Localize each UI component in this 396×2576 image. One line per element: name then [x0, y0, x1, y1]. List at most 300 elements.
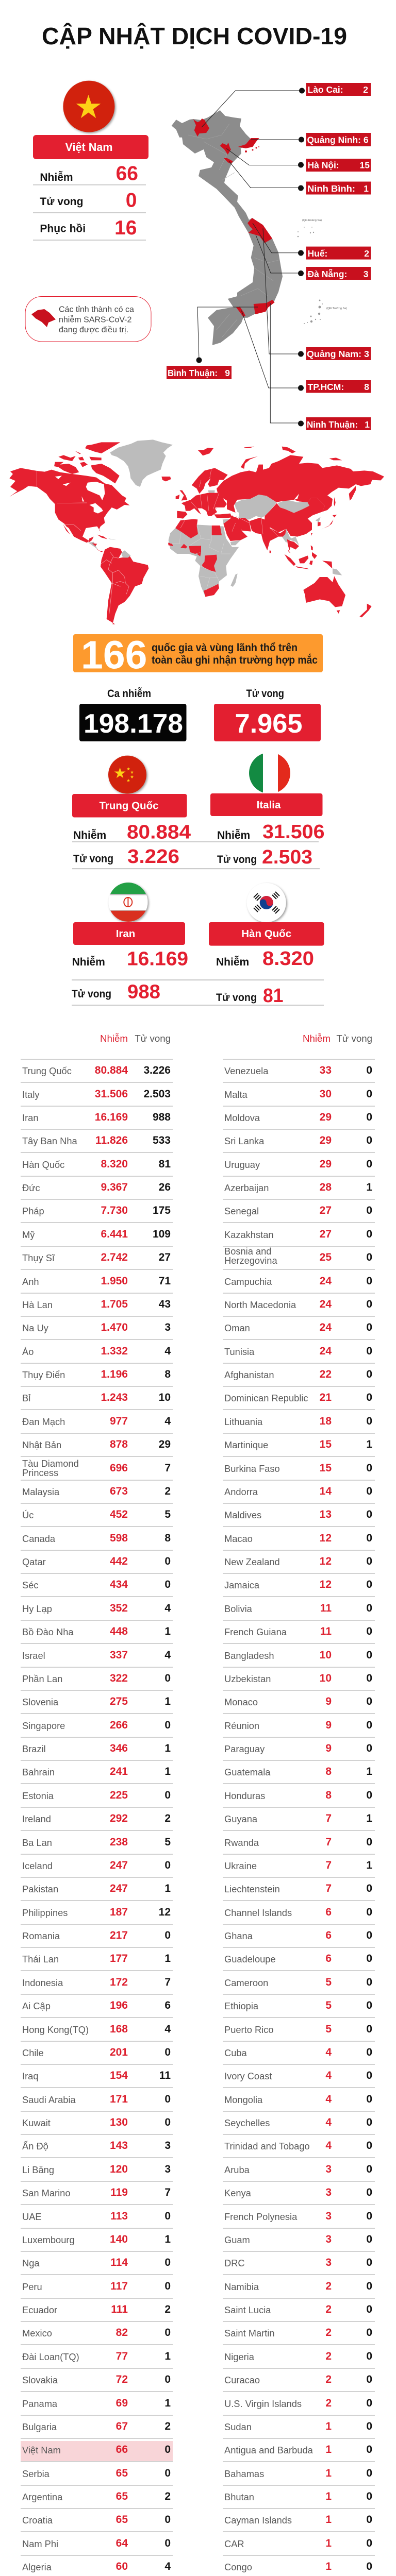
row: Bahrain — [21, 1761, 173, 1784]
row: Ghana: Ghana — [224, 1930, 253, 1941]
row: Uzbekistan: Uzbekistan — [224, 1673, 271, 1684]
row: Trinidad and Tobago: 4 — [325, 2140, 332, 2151]
label: Lào Cai: Lào Cai: — [307, 84, 343, 95]
row: Úc: 5 — [164, 1509, 171, 1520]
province: Ninh Bình — [224, 158, 233, 164]
row: Réunion — [223, 1714, 375, 1738]
row: Ecuador: Ecuador — [22, 2304, 57, 2315]
row: Iraq — [21, 2065, 173, 2088]
row: Thái Lan: 1 — [164, 1953, 171, 1964]
row: Bulgaria: Bulgaria — [22, 2421, 57, 2432]
row: Ecuador: 2 — [164, 2303, 171, 2315]
map: Americas and Greenland — [9, 439, 173, 624]
row: Kenya: 0 — [366, 2187, 372, 2198]
row: Thụy Điển: 1.196 — [101, 1368, 128, 1380]
row: Peru: Peru — [22, 2281, 42, 2292]
row: Trung Quốc: 80.884 — [95, 1064, 128, 1076]
stats: Trung Quốc: 80.884 — [127, 821, 191, 843]
row: Pakistan: Pakistan — [22, 1884, 58, 1894]
row: Mongolia — [223, 2088, 375, 2112]
row: Seychelles: Seychelles — [224, 2117, 270, 2128]
row: Congo — [223, 2556, 375, 2576]
row: Ba Lan: 5 — [164, 1836, 171, 1848]
row: New Zealand: 12 — [320, 1555, 332, 1567]
row: Indonesia: Indonesia — [22, 1977, 63, 1988]
row: Singapore: Singapore — [22, 1720, 65, 1731]
row: Saint Lucia: 2 — [325, 2303, 332, 2315]
row: Hy Lạp: 352 — [110, 1602, 128, 1614]
row: Dominican Republic: 21 — [320, 1392, 332, 1403]
row: Philippines: 12 — [159, 1906, 171, 1918]
row: Slovakia: 72 — [116, 2374, 128, 2385]
row: Ethiopia: 0 — [366, 1999, 372, 2011]
row: DRC — [223, 2252, 375, 2275]
row: Bulgaria — [21, 2415, 173, 2439]
row: Ecuador: 111 — [111, 2303, 128, 2315]
row: Antigua and Barbuda: 0 — [366, 2444, 372, 2455]
row: Nhật Bản: 29 — [159, 1438, 171, 1450]
row: Thụy Sĩ: Thụy Sĩ — [22, 1252, 55, 1263]
row: Curacao: 0 — [366, 2374, 372, 2385]
row: Qatar: 0 — [164, 1555, 171, 1567]
row: Bolivia: 0 — [366, 1602, 372, 1614]
row: U.S. Virgin Islands: 2 — [325, 2397, 332, 2409]
row: Tây Ban Nha — [21, 1130, 173, 1153]
row: Antigua and Barbuda: Antigua and Barbuda — [224, 2445, 313, 2455]
row: Ấn Độ: 143 — [110, 2140, 128, 2151]
row: Cuba: 0 — [366, 2046, 372, 2058]
row: Jamaica: 0 — [366, 1579, 372, 1590]
row: Slovenia: 275 — [110, 1696, 128, 1707]
row: Oman: 24 — [320, 1321, 332, 1333]
row: Iraq: Iraq — [22, 2071, 39, 2081]
row: Puerto Rico: Puerto Rico — [224, 2024, 274, 2035]
row: Bỉ: Bỉ — [22, 1393, 30, 1403]
row: Malta: 30 — [320, 1088, 332, 1099]
row: Bhutan: 0 — [366, 2490, 372, 2502]
row: Jamaica: 12 — [320, 1579, 332, 1590]
row: Dominican Republic: 0 — [366, 1392, 372, 1403]
row: CAR: 0 — [366, 2537, 372, 2549]
row: Liechtenstein: 0 — [366, 1883, 372, 1894]
row: Slovenia — [21, 1691, 173, 1714]
row: Malaysia — [21, 1481, 173, 1504]
row: Chile: Chile — [22, 2047, 44, 2058]
table: right column — [223, 1059, 375, 2576]
row: Argentina: 2 — [164, 2490, 171, 2502]
row: Nigeria: 0 — [366, 2350, 372, 2362]
row: Burkina Faso — [223, 1457, 375, 1481]
heading: Iran: Iran — [116, 928, 135, 940]
row: Anh — [21, 1270, 173, 1293]
row: Estonia: 0 — [164, 1789, 171, 1801]
row: Andorra: 0 — [366, 1485, 372, 1497]
row: Maldives: 0 — [366, 1509, 372, 1520]
row: Cameroon: 5 — [325, 1976, 332, 1988]
table header: left: Nhiễm — [100, 1033, 128, 1044]
table header: right — [303, 1033, 372, 1044]
stat: global deaths: 7.965 — [235, 709, 302, 739]
row: Séc: 0 — [164, 1579, 171, 1590]
row: Venezuela: 33 — [320, 1064, 332, 1076]
row: Romania — [21, 1925, 173, 1948]
row: Aruba: 3 — [325, 2163, 332, 2175]
row: Li Băng: 120 — [110, 2163, 128, 2175]
row: Venezuela: 0 — [366, 1064, 372, 1076]
row: Cameroon: 0 — [366, 1976, 372, 1988]
row: Việt Nam (highlighted): 66 — [116, 2444, 128, 2455]
table: left column — [21, 1059, 173, 2576]
row: Sudan: 0 — [366, 2420, 372, 2432]
row: Indonesia: 7 — [164, 1976, 171, 1988]
row: Guatemala: 8 — [325, 1766, 332, 1777]
row: Saint Lucia: 0 — [366, 2303, 372, 2315]
stats: Iran — [72, 948, 188, 1003]
row: Honduras: Honduras — [224, 1790, 265, 1801]
label: Hà Nội: Hà Nội: — [307, 160, 339, 170]
heading: Trung Quốc: Trung Quốc — [99, 800, 159, 812]
row: Saudi Arabia: 171 — [110, 2093, 128, 2105]
row: Lithuania: 18 — [320, 1415, 332, 1427]
row: Slovenia: 1 — [164, 1696, 171, 1707]
row: Cayman Islands: 0 — [366, 2514, 372, 2526]
top graphics: header, maps, stat cards — [9, 23, 384, 1007]
row: Kazakhstan: Kazakhstan — [224, 1229, 274, 1240]
row: Bhutan: 1 — [325, 2490, 332, 2502]
row: Campuchia: 0 — [366, 1275, 372, 1287]
row: Đài Loan(TQ): Đài Loan(TQ) — [22, 2351, 79, 2362]
row: Moldova: 0 — [366, 1111, 372, 1123]
row: Thụy Sĩ: 27 — [159, 1251, 171, 1263]
row: Sri Lanka: 0 — [366, 1134, 372, 1146]
row: Hàn Quốc: 81 — [159, 1158, 171, 1170]
row: North Macedonia: 24 — [320, 1298, 332, 1310]
row: Andorra: 14 — [320, 1485, 332, 1497]
callout: 166 countries: quốc gia và vùng lãnh thổ trên — [152, 642, 298, 654]
row: Afghanistan — [223, 1364, 375, 1387]
row: Nhật Bản: 878 — [110, 1438, 128, 1450]
label: Huế: Huế: — [307, 248, 327, 259]
row: Iran — [21, 1107, 173, 1130]
row: Áo — [21, 1340, 173, 1364]
row: Bangladesh — [223, 1644, 375, 1667]
world map — [9, 439, 384, 624]
panel: Hàn Quốc — [209, 883, 324, 1007]
row: Hy Lạp: 4 — [164, 1602, 171, 1614]
row: Jamaica — [223, 1574, 375, 1597]
row: U.S. Virgin Islands: 0 — [366, 2397, 372, 2409]
callout: 166 countries: 166 — [81, 633, 147, 677]
row: Channel Islands: 6 — [325, 1906, 332, 1918]
row: Cayman Islands — [223, 2509, 375, 2532]
map: Europe, Africa, Asia and Oceania — [168, 447, 384, 617]
row: Tunisia: 24 — [320, 1345, 332, 1357]
stat: recovered: 16 — [114, 217, 137, 239]
row: Panama: 1 — [164, 2397, 171, 2409]
table header: right: Tử vong — [336, 1033, 372, 1044]
row: French Polynesia: 3 — [325, 2210, 332, 2222]
row: Oman — [223, 1317, 375, 1340]
stat: recovered — [33, 217, 146, 241]
row: Guyana: Guyana — [224, 1814, 257, 1824]
row: Uzbekistan: 10 — [320, 1672, 332, 1684]
label: Ninh Bình — [298, 181, 371, 195]
row: Đức: Đức — [22, 1182, 40, 1193]
row: Bahamas: 0 — [366, 2467, 372, 2479]
row: Đan Mạch: Đan Mạch — [22, 1416, 65, 1427]
row: Mongolia: Mongolia — [224, 2094, 262, 2105]
row: Thụy Điển: 8 — [164, 1368, 171, 1380]
row: Indonesia: 172 — [110, 1976, 128, 1988]
row: Antigua and Barbuda: 1 — [325, 2444, 332, 2455]
row: Hàn Quốc: 8.320 — [101, 1158, 128, 1170]
row: Uzbekistan — [223, 1667, 375, 1691]
row: Thái Lan: 177 — [110, 1953, 128, 1964]
row: French Polynesia: French Polynesia — [224, 2211, 297, 2222]
row: Hà Lan: 43 — [159, 1298, 171, 1310]
stats: Hàn Quốc: Nhiễm — [216, 956, 249, 968]
row: Ivory Coast: 0 — [366, 2070, 372, 2081]
row: Luxembourg: 140 — [110, 2233, 128, 2245]
row: North Macedonia: North Macedonia — [224, 1299, 296, 1310]
row: Malta — [223, 1083, 375, 1107]
row: Bolivia: 11 — [320, 1602, 332, 1614]
row: Rwanda — [223, 1831, 375, 1855]
row: Lithuania: 0 — [366, 1415, 372, 1427]
row: Croatia — [21, 2509, 173, 2532]
heading: Iran — [73, 922, 185, 945]
row: French Guiana: 11 — [320, 1625, 332, 1637]
row: Ukraine: 7 — [325, 1859, 332, 1871]
row: Bahrain: Bahrain — [22, 1767, 55, 1777]
row: Andorra: Andorra — [224, 1486, 258, 1497]
row: Bồ Đào Nha — [21, 1621, 173, 1644]
stats: Hàn Quốc: 81 — [263, 985, 284, 1007]
row: Lithuania — [223, 1410, 375, 1434]
row: Martinique: 1 — [366, 1438, 372, 1450]
row: Canada: Canada — [22, 1533, 55, 1544]
row: Ivory Coast: 4 — [325, 2070, 332, 2081]
row: Hong Kong(TQ): 168 — [110, 2023, 128, 2035]
row: Liechtenstein: 7 — [325, 1883, 332, 1894]
row: San Marino: 119 — [110, 2187, 128, 2198]
row: Sri Lanka: Sri Lanka — [224, 1136, 264, 1146]
row: Maldives: Maldives — [224, 1510, 261, 1520]
row: Bhutan: Bhutan — [224, 2492, 254, 2502]
stat: recovered: Phục hồi — [40, 223, 86, 235]
label: Quảng Nam — [298, 347, 371, 360]
row: CAR — [223, 2532, 375, 2556]
label: TP.HCM: 8 — [364, 382, 369, 392]
row: Đức: 26 — [159, 1181, 171, 1193]
row: Dominican Republic — [223, 1387, 375, 1410]
row: Kuwait: 130 — [110, 2116, 128, 2128]
row: Brazil: 1 — [164, 1742, 171, 1754]
row: Liechtenstein: Liechtenstein — [224, 1884, 280, 1894]
row: Iran: 16.169 — [95, 1111, 128, 1123]
row: Áo: Áo — [22, 1346, 34, 1357]
row: U.S. Virgin Islands — [223, 2392, 375, 2415]
row: Trung Quốc: 3.226 — [143, 1064, 171, 1076]
row: Tunisia: 0 — [366, 1345, 372, 1357]
row: Brazil: Brazil — [22, 1743, 46, 1754]
row: Iraq: 11 — [159, 2070, 171, 2081]
row: Đài Loan(TQ): 77 — [116, 2350, 128, 2362]
row: Serbia: 0 — [164, 2467, 171, 2479]
row: Estonia: Estonia — [22, 1790, 54, 1801]
row: Sudan: Sudan — [224, 2421, 252, 2432]
stats: Iran: 16.169 — [127, 948, 188, 970]
row: Lithuania: Lithuania — [224, 1416, 262, 1427]
row: Mongolia: 4 — [325, 2093, 332, 2105]
row: Malta: 0 — [366, 1088, 372, 1099]
row: Luxembourg — [21, 2229, 173, 2252]
row: Singapore — [21, 1714, 173, 1738]
icon: province shape — [31, 309, 56, 327]
row: Macao: 12 — [320, 1532, 332, 1544]
row: Campuchia — [223, 1270, 375, 1293]
row: Anh: 71 — [159, 1275, 171, 1287]
label: Đà Nẵng: 3 — [364, 269, 369, 279]
row: Uruguay: Uruguay — [224, 1159, 260, 1170]
row: Brazil: 346 — [110, 1742, 128, 1754]
row: Italy — [21, 1083, 173, 1107]
row: Ukraine: 1 — [366, 1859, 372, 1871]
row: Bahamas — [223, 2462, 375, 2486]
callout: 166 countries: toàn cầu ghi nhận trường hợp mắc — [152, 654, 318, 666]
row: Estonia — [21, 1784, 173, 1808]
row: Bhutan — [223, 2486, 375, 2509]
row: Azerbaijan: 1 — [366, 1181, 372, 1193]
row: Ireland: Ireland — [22, 1814, 51, 1824]
label: Lào Cai: 2 — [363, 84, 368, 95]
stat: deaths — [33, 190, 146, 213]
row: Channel Islands: Channel Islands — [224, 1907, 292, 1918]
row: Trinidad and Tobago — [223, 2135, 375, 2158]
row: Maldives: 13 — [320, 1509, 332, 1520]
row: Ấn Độ: Ấn Độ — [22, 2141, 48, 2151]
row: Ba Lan — [21, 1831, 173, 1855]
row: Phần Lan: 322 — [110, 1672, 128, 1684]
stat: deaths: 0 — [126, 190, 137, 211]
row: Paraguay: 9 — [325, 1742, 332, 1754]
row: Slovenia: Slovenia — [22, 1697, 58, 1707]
row: San Marino: San Marino — [22, 2188, 70, 2198]
row: North Macedonia — [223, 1293, 375, 1317]
row: Martinique: Martinique — [224, 1439, 268, 1450]
row: Guadeloupe — [223, 1948, 375, 1971]
row: Trinidad and Tobago: 0 — [366, 2140, 372, 2151]
row: Đức: 9.367 — [101, 1181, 128, 1193]
row: UAE: UAE — [22, 2211, 42, 2222]
stats: Italia: Tử vong — [217, 854, 257, 866]
row: Sudan — [223, 2415, 375, 2439]
row: French Guiana: 0 — [366, 1625, 372, 1637]
row: Liechtenstein — [223, 1878, 375, 1901]
row: Panama: Panama — [22, 2398, 57, 2409]
title: CẬP NHẬT DỊCH COVID-19 — [42, 23, 347, 49]
row: Séc: Séc — [22, 1580, 39, 1590]
row: Luxembourg: 1 — [164, 2233, 171, 2245]
row: Philippines: 187 — [110, 1906, 128, 1918]
row: Chile — [21, 2041, 173, 2065]
row: Afghanistan: 0 — [366, 1368, 372, 1380]
panel: Việt Nam summary — [33, 81, 148, 241]
row: Ai Cập — [21, 1995, 173, 2018]
row: Honduras: 0 — [366, 1789, 372, 1801]
row: Thụy Điển — [21, 1364, 173, 1387]
row: Ấn Độ: 3 — [164, 2140, 171, 2151]
row: Uruguay: 0 — [366, 1158, 372, 1170]
table header: left: Tử vong — [135, 1033, 171, 1044]
row: Na Uy: Na Uy — [22, 1323, 48, 1333]
row: Li Băng — [21, 2158, 173, 2182]
row: Venezuela — [223, 1060, 375, 1083]
province: Quảng Ninh — [238, 138, 259, 152]
row: Slovakia: Slovakia — [22, 2375, 58, 2385]
row: Jamaica: Jamaica — [224, 1580, 259, 1590]
row: Guyana: 7 — [325, 1812, 332, 1824]
row: Việt Nam (highlighted) — [21, 2439, 173, 2462]
row: Aruba: Aruba — [224, 2164, 250, 2175]
row: Nga — [21, 2252, 173, 2275]
row: Trung Quốc: Trung Quốc — [22, 1065, 72, 1076]
row: Ai Cập: Ai Cập — [22, 2001, 51, 2011]
province: TP.HCM — [236, 307, 245, 317]
stats: Trung Quốc: Nhiễm — [73, 829, 106, 841]
row: Aruba: 0 — [366, 2163, 372, 2175]
stats: Italia: 31.506 — [262, 821, 325, 843]
row: Phần Lan — [21, 1667, 173, 1691]
row: Cameroon — [223, 1971, 375, 1995]
row: Israel: 4 — [164, 1649, 171, 1661]
row: Guadeloupe: 6 — [325, 1953, 332, 1964]
row: Senegal: 27 — [320, 1205, 332, 1216]
row: Bolivia — [223, 1597, 375, 1621]
row: Italy: Italy — [22, 1089, 40, 1099]
row: Argentina: Argentina — [22, 2492, 62, 2502]
row: Saint Lucia — [223, 2299, 375, 2322]
row: Namibia: 0 — [366, 2280, 372, 2292]
row: Guatemala — [223, 1761, 375, 1784]
row: Áo: 4 — [164, 1345, 171, 1357]
row: Kazakhstan: 0 — [366, 1228, 372, 1240]
row: Algeria: Algeria — [22, 2562, 52, 2572]
label: Bình Thuận: Bình Thuận: — [168, 368, 218, 378]
row: Rwanda: Rwanda — [224, 1837, 259, 1848]
row: Peru: 0 — [164, 2280, 171, 2292]
icon: South Korea flag — [247, 883, 286, 922]
label: Quảng Ninh: Quảng Ninh: 6 — [307, 135, 369, 145]
row: Hàn Quốc — [21, 1153, 173, 1177]
row: Malta: Malta — [224, 1089, 248, 1099]
icon: China flag — [108, 756, 146, 794]
row: Ireland: 292 — [110, 1812, 128, 1824]
row: Canada: 8 — [164, 1532, 171, 1544]
row: Indonesia — [21, 1971, 173, 1995]
row: Luxembourg: Luxembourg — [22, 2234, 75, 2245]
province: Lào Cai — [193, 118, 209, 137]
row: Qatar: 442 — [110, 1555, 128, 1567]
row: Monaco: Monaco — [224, 1697, 258, 1707]
row: Seychelles: 4 — [325, 2116, 332, 2128]
row: Ba Lan: Ba Lan — [22, 1837, 52, 1848]
row: Iceland: 247 — [110, 1859, 128, 1871]
row: Qatar — [21, 1551, 173, 1574]
row: Moldova — [223, 1107, 375, 1130]
stat: infected: 66 — [116, 163, 138, 184]
row: Israel: Israel — [22, 1650, 45, 1661]
